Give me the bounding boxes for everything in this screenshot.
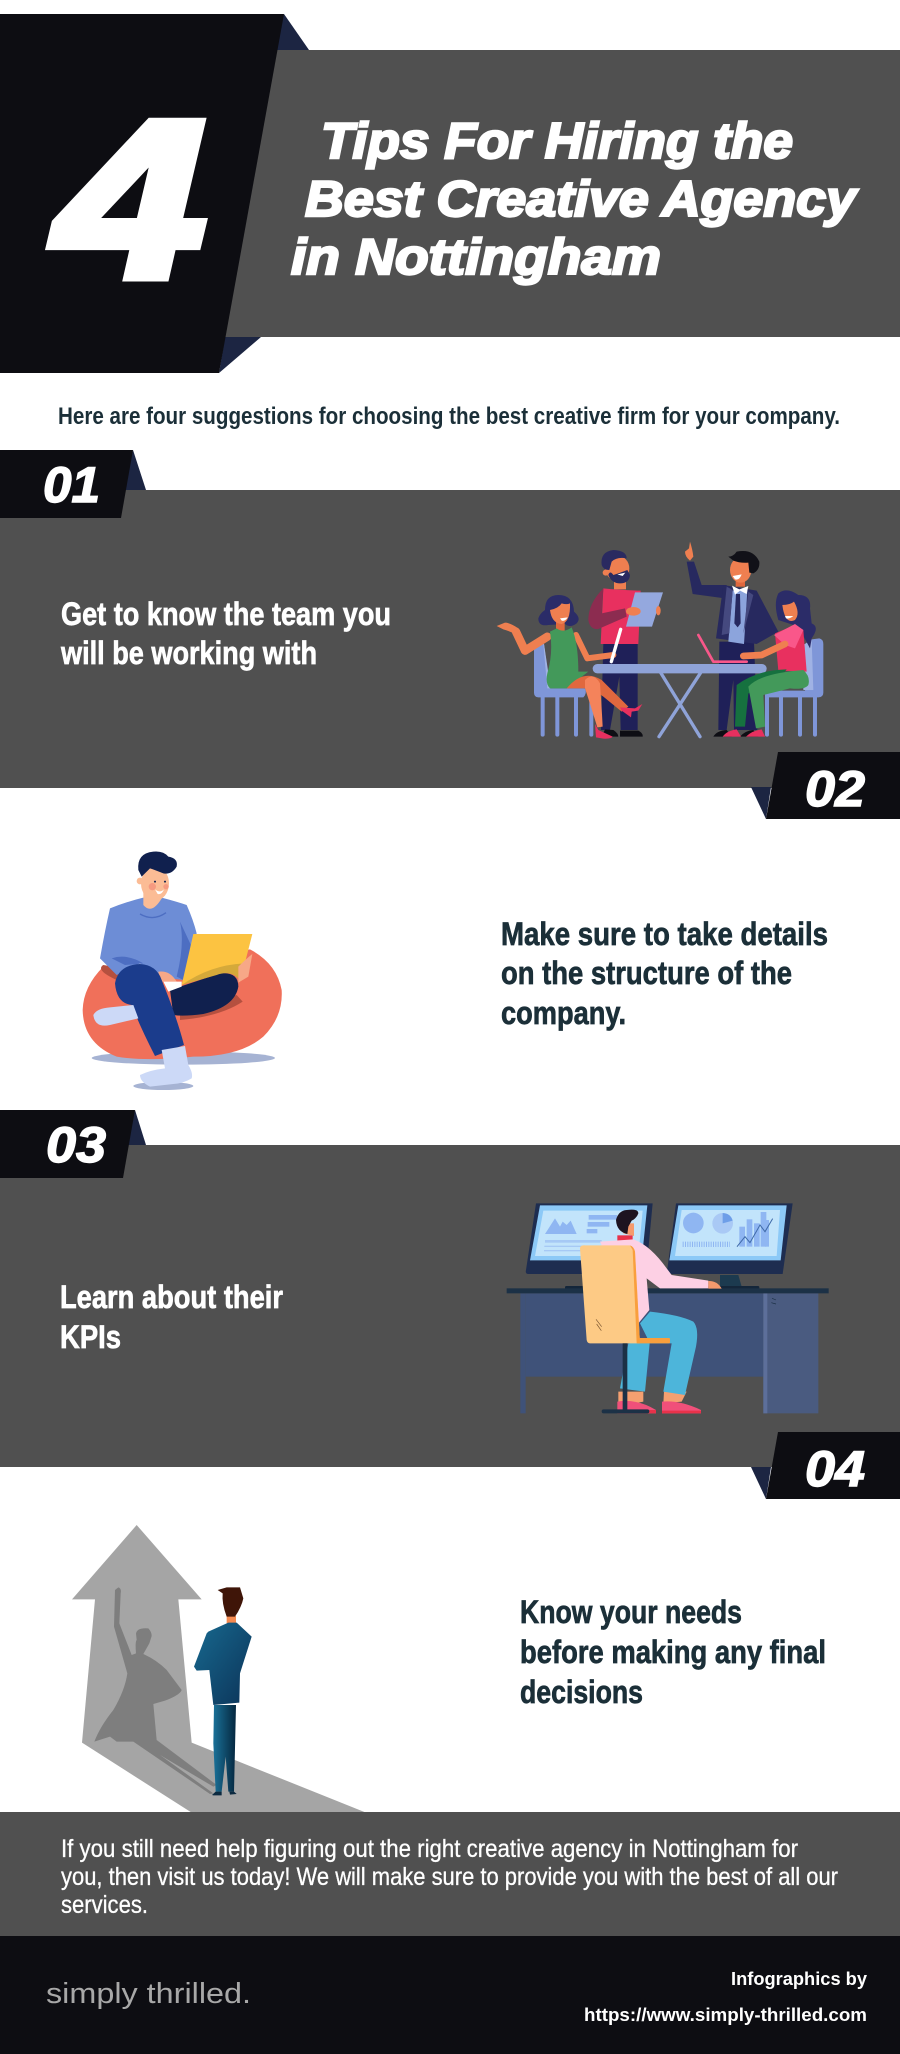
illustration: team meeting [497, 542, 823, 739]
step 1 text: will be working with [60, 635, 317, 671]
panel: step 1 band [0, 490, 900, 788]
footer [0, 1936, 900, 2054]
title [291, 113, 858, 285]
title: in Nottingham [291, 229, 661, 285]
number tab 02 [751, 752, 900, 819]
illustration: man with superhero shadow and arrow [72, 1525, 366, 1813]
number tab 04 [751, 1432, 900, 1499]
step 4 text: before making any final [520, 1634, 826, 1670]
step 3 text [60, 1279, 283, 1355]
number tab 04: 04 [805, 1441, 865, 1497]
number tab 03 [0, 1110, 146, 1178]
panel: step 3 band [0, 1145, 900, 1467]
title: Tips For Hiring the [321, 113, 793, 169]
title: Best Creative Agency [305, 171, 858, 227]
step 1 text: Get to know the team you [61, 596, 391, 632]
step 4 text [520, 1594, 826, 1710]
panel: closing message [0, 1812, 900, 1936]
illustration: analyst at desk with two monitors [507, 1203, 829, 1413]
credit: Infographics by [731, 1969, 867, 1989]
step 3 text: KPIs [60, 1319, 121, 1355]
number tab 01 [0, 450, 146, 518]
panel: closing message: If you still need help figuring out the right creative agency in Nottingham for [61, 1835, 798, 1863]
panel: closing message: services. [61, 1891, 148, 1919]
step 4 text: decisions [520, 1674, 643, 1710]
logo: simply thrilled. [46, 1978, 251, 2010]
header banner [0, 14, 900, 373]
step 2 text: Make sure to take details [501, 916, 828, 952]
step 3 text: Learn about their [60, 1279, 283, 1315]
step 1 text [60, 596, 391, 671]
step 2 text: company. [501, 995, 626, 1031]
step 2 text [501, 916, 828, 1031]
number tab 01: 01 [43, 457, 100, 513]
big number 4: 4 [51, 73, 206, 325]
step 4 text: Know your needs [520, 1594, 742, 1630]
step 2 text: on the structure of the [501, 955, 792, 991]
number tab 03: 03 [46, 1117, 106, 1173]
url: https://www.simply-thrilled.com [584, 2005, 867, 2025]
illustration: man on beanbag with laptop [83, 852, 282, 1090]
number tab 02: 02 [805, 761, 865, 817]
